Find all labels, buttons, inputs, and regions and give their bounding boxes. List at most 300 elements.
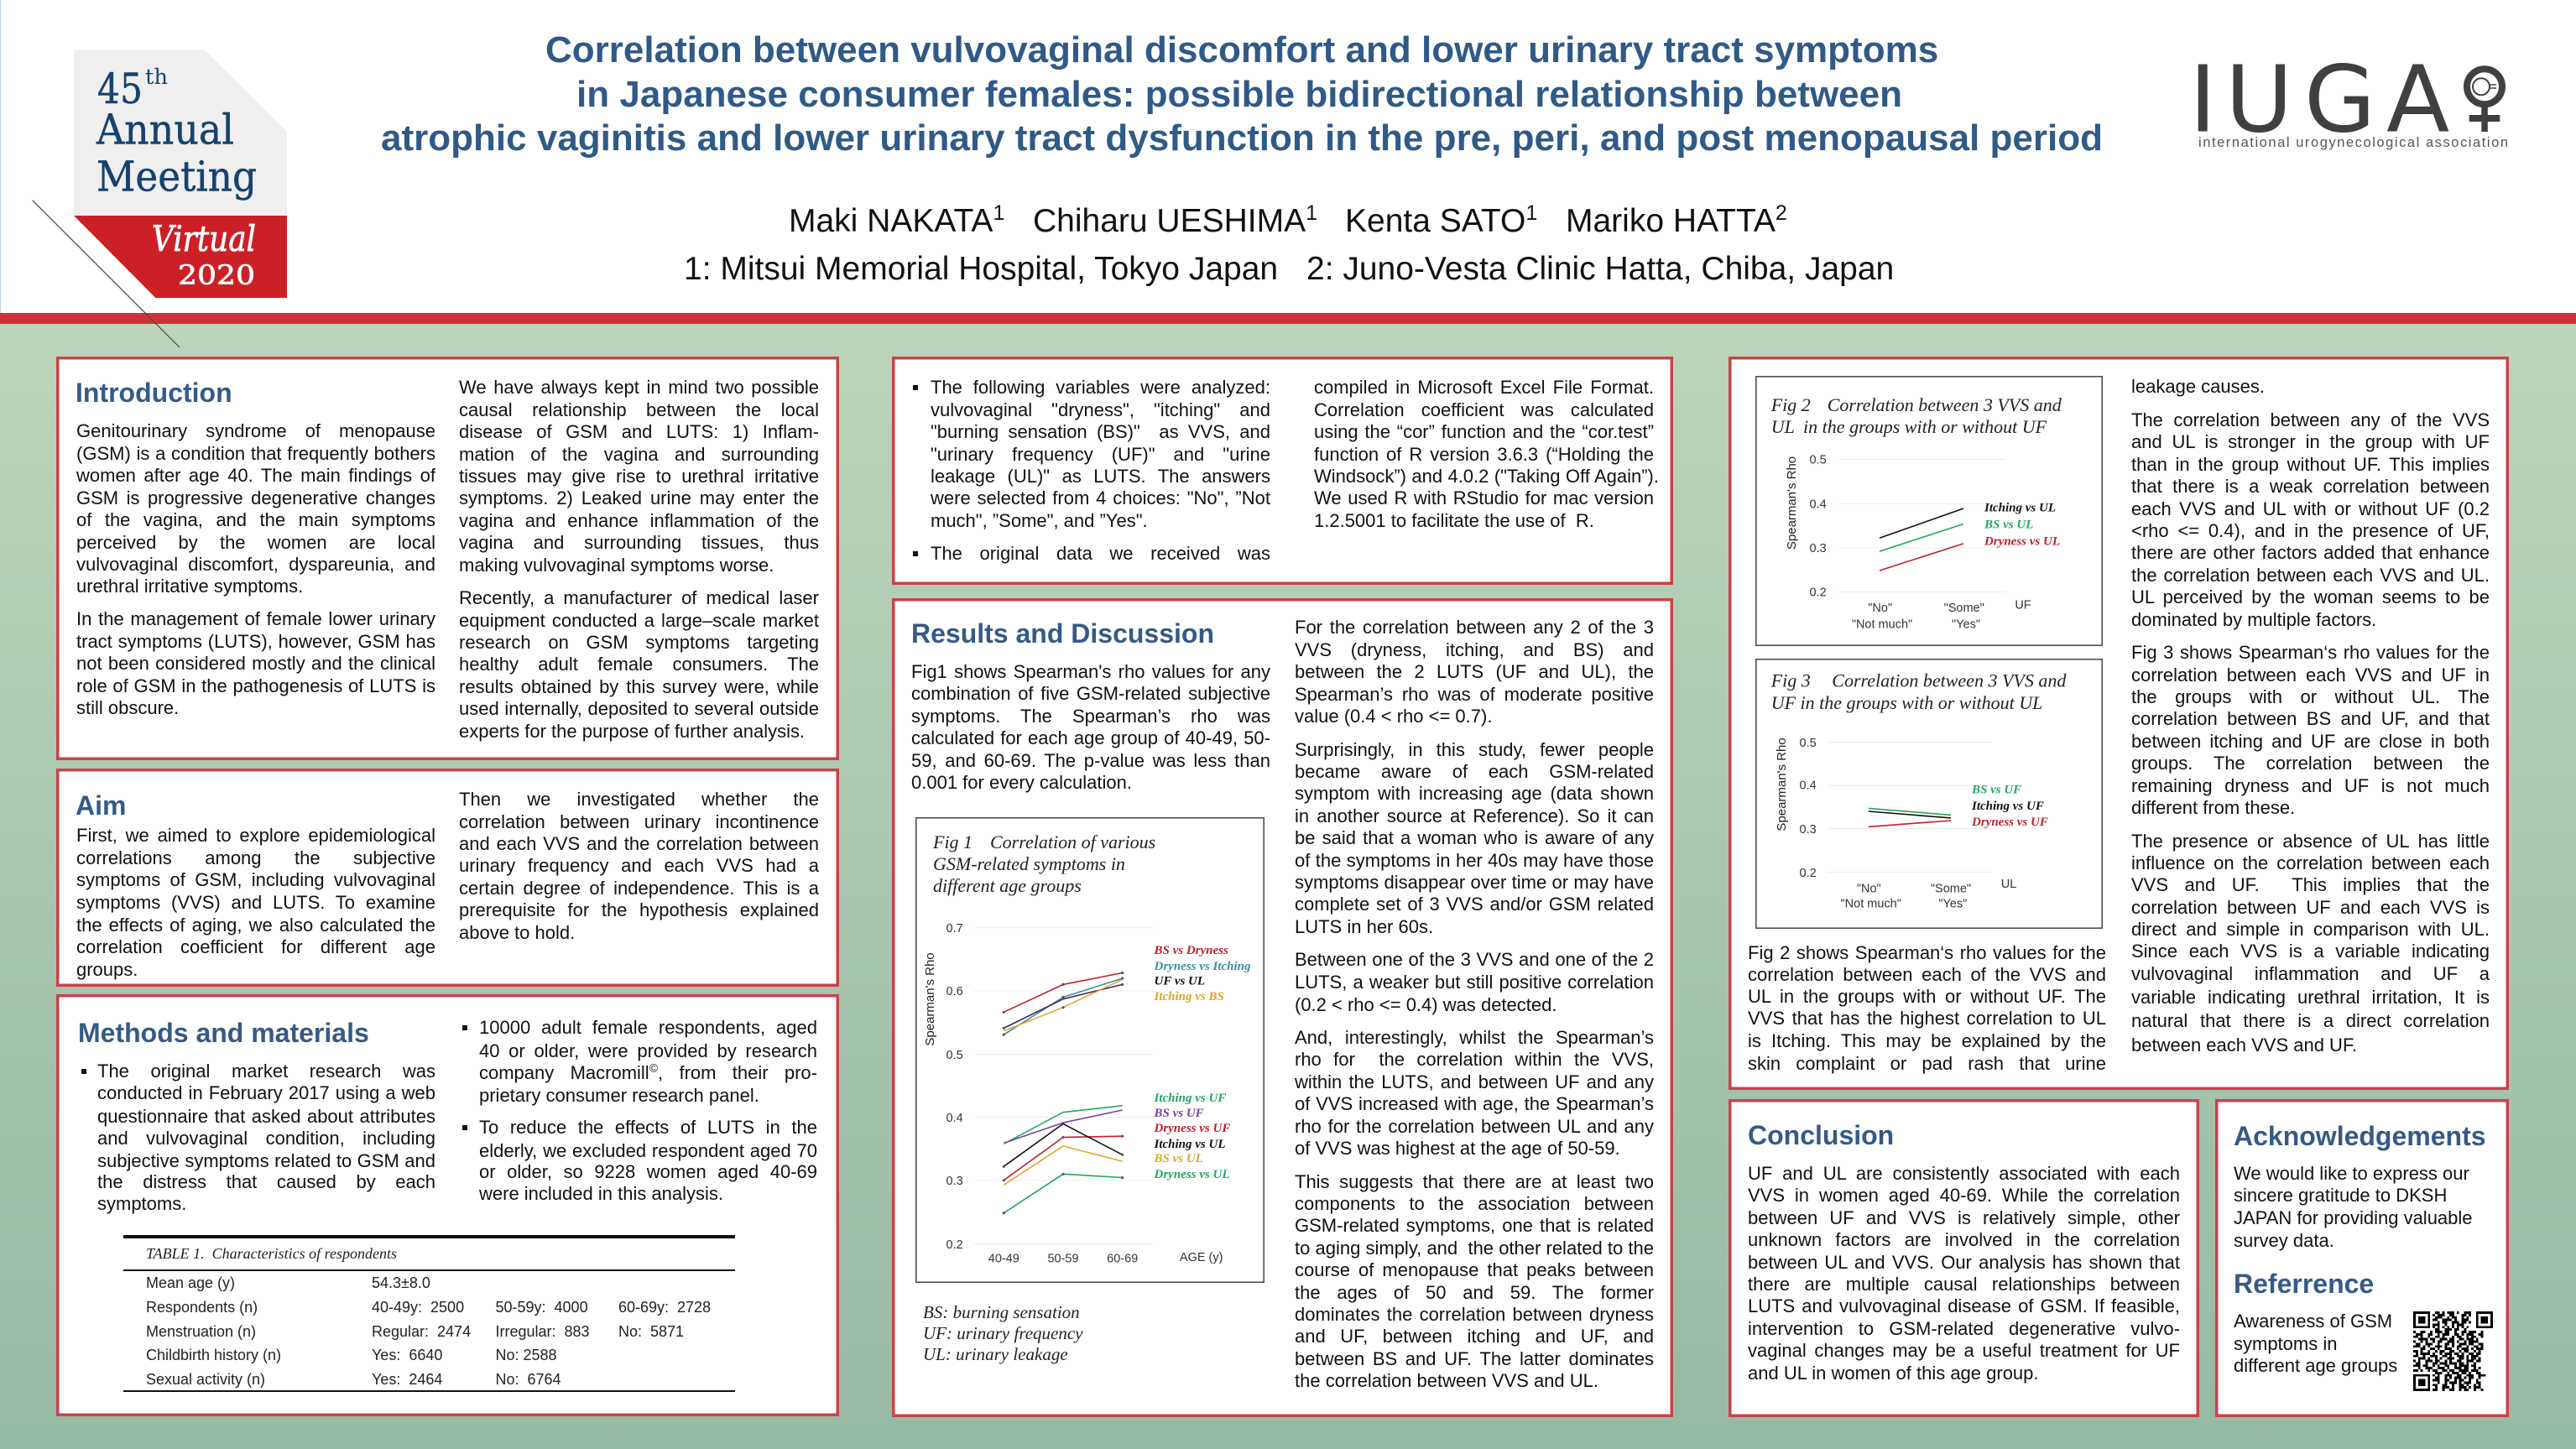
authors	[789, 201, 1787, 239]
panel: methods and materials	[56, 994, 839, 1416]
bullet marker	[913, 385, 918, 390]
table 1: characteristics of respondents: Sexual activity (n)	[146, 1371, 265, 1388]
text: conclusion body: VVS in women aged 40-69. While the correlation	[1748, 1185, 2180, 1206]
panel: results and discussion	[892, 598, 1673, 1417]
chart: figure 3 correlation with UF	[1755, 659, 2103, 929]
table 1: characteristics of respondents: No: 5871	[618, 1323, 684, 1340]
text: conclusion body: unknown factors are involved in the correlation	[1748, 1229, 2180, 1250]
chart: figure 3 correlation with UF: 0.2	[1800, 867, 1817, 880]
text: fig 1 description: 59, and 60-69. The p-value was less than	[911, 750, 1270, 771]
text: discussion right column: influence on the correlation between each	[2131, 852, 2490, 873]
table 1: characteristics of respondents: 40-49y: 2500	[372, 1299, 464, 1316]
text: introduction right column: vagina and surrounding tissues, thus	[459, 532, 819, 553]
chart: figure 1 correlation by age group: 50-59	[1047, 1253, 1079, 1266]
chart: figure 2 correlation with UL: Spearman's Rho	[1785, 456, 1799, 550]
heading: conclusion: Conclusion	[1748, 1120, 1894, 1150]
heading: results and discussion: Results and Discussion	[911, 618, 1214, 649]
text: discussion right column: VVS and UF. This implies that the	[2131, 874, 2490, 895]
text: methods second bullet: company Macromill©, from their pro-	[479, 1061, 817, 1083]
authors: Kenta SATO1	[1345, 201, 1537, 239]
text: discussion right column: Fig 3 shows Spearman‘s rho values for the	[2131, 642, 2490, 663]
table 1: characteristics of respondents: Menstruation (n)	[146, 1323, 256, 1340]
text: methods first bullet: and vulvovaginal condition, including	[97, 1128, 435, 1149]
text: methods third bullet: elderly, we excluded respondent aged 70	[479, 1140, 817, 1161]
text: introduction left column: still obscure.	[76, 697, 179, 718]
text: methods third bullet: or older, so 9228 women aged 40-69	[479, 1161, 817, 1182]
text: results right column	[1295, 617, 1654, 1391]
text: introduction left column: In the management of female lower urinary	[76, 608, 435, 629]
text: aim left column: correlations among the subjective	[76, 847, 435, 868]
text: results right column: LUTS in her 60s.	[1295, 916, 1433, 937]
text: discussion right column: Since each VVS is a variable indicating	[2131, 941, 2490, 962]
text: conclusion body: LUTS and vulvovaginal disease of GSM. If feasible,	[1748, 1295, 2180, 1316]
chart: figure 1 correlation by age group: Correlation of various	[990, 831, 1155, 852]
text: methods first bullet: the distress that caused by each	[97, 1171, 435, 1192]
chart: figure 2 correlation with UL: in the groups with or without UF	[1803, 416, 2047, 437]
chart: figure 1 correlation by age group: BS vs Dryness	[1153, 944, 1228, 957]
text: fig 1 description: 0.001 for every calculation.	[911, 772, 1132, 793]
table 1: characteristics of respondents: 60-69y: 2728	[618, 1299, 711, 1316]
text: fig 1 description: combination of five GSM-related subjective	[911, 683, 1270, 704]
text: data format and software: Correlation coefficient was calculated	[1314, 399, 1654, 420]
text: variables analyzed: "burning sensation (BS)" as VVS, and	[931, 421, 1270, 442]
text: discussion right column: correlation between BS and UF, and that	[2131, 708, 2490, 729]
text: introduction right column: vagina and enhance inflammation of the	[459, 510, 819, 531]
authors: Chiharu UESHIMA1	[1033, 201, 1317, 239]
text: results right column: components to the association between	[1295, 1193, 1654, 1214]
text: aim right column	[459, 789, 819, 943]
decorative diagonal line	[32, 200, 180, 347]
text: acknowledgements body: survey data.	[2234, 1230, 2334, 1251]
title	[381, 29, 2103, 159]
chart: figure 1 correlation by age group: AGE (y)	[1180, 1251, 1223, 1264]
text: introduction right column: disease of GSM and LUTS: 1) Inflam-	[459, 421, 819, 442]
chart: figure 1 correlation by age group: BS vs UL	[1153, 1152, 1203, 1165]
chart: figure 2 correlation with UL: 0.5	[1810, 454, 1827, 467]
text: results right column: (0.2 < rho <= 0.4) was detected.	[1295, 993, 1557, 1015]
text: introduction left column: vulvovaginal discomfort, dyspareunia, and	[76, 554, 435, 574]
chart: figure 2 correlation with UL: Dryness vs UL	[1984, 534, 2060, 548]
text: variables analyzed: were selected from 4 choices: "No", ”Not	[931, 487, 1270, 508]
chart: figure 2 correlation with UL: Fig 2	[1770, 394, 1811, 415]
chart: figure 3 correlation with UF: "No"	[1857, 883, 1881, 896]
text: discussion right column: UL perceived by the woman seems to be	[2131, 586, 2490, 607]
text: reference description: Awareness of GSM	[2234, 1311, 2392, 1332]
chart: figure 3 correlation with UF: Fig 3	[1770, 670, 1811, 691]
chart: figure 1 correlation by age group: Spearman's Rho	[923, 952, 937, 1046]
text: variables analyzed: leakage (UL)" as LUTS. The answers	[931, 466, 1270, 487]
text: results right column: in another source at Reference). So it can	[1295, 805, 1654, 826]
bullet marker	[81, 1069, 86, 1074]
chart: figure 3 correlation with UF: Correlation between 3 VVS and	[1832, 670, 2067, 691]
panel: introduction	[56, 357, 839, 760]
text: introduction left column: not been considered mostly and the clinical	[76, 653, 435, 674]
text: data format and software: using the “cor” function and the “cor.test”	[1314, 421, 1654, 442]
chart: figure 1 correlation by age group: 0.2	[946, 1238, 963, 1252]
text: results right column: rho for the correlation within the VVS,	[1295, 1049, 1654, 1070]
chart: figure 1 correlation by age group: Dryness vs UF	[1153, 1122, 1230, 1135]
title: in Japanese consumer females: possible bidirectional relationship between	[576, 74, 1902, 115]
text: conclusion body: and UL in women of this age group.	[1748, 1363, 2039, 1384]
text: results right column: the ages of 50 and 59. The former	[1295, 1282, 1654, 1303]
affiliations: 1: Mitsui Memorial Hospital, Tokyo Japan	[684, 251, 1278, 287]
text: introduction right column: research on GSM symptoms targeting	[459, 632, 819, 653]
chart: figure 1 correlation by age group: BS vs UF	[1153, 1107, 1204, 1120]
text: aim left column	[76, 825, 435, 980]
chart: figure 1 correlation by age group: GSM-related symptoms in	[933, 853, 1125, 874]
chart: figure 3 correlation with UF: BS vs UF	[1971, 784, 2021, 797]
chart: figure 2 correlation with UL: Itching vs UL	[1984, 502, 2056, 515]
text: discussion right column: there are other factors added that enhance	[2131, 542, 2490, 563]
chart: figure 3 correlation with UF: Itching vs UF	[1971, 800, 2044, 813]
text: fig 2 description: VVS that has the highest correlation to UL	[1748, 1008, 2106, 1029]
chart: figure 3 correlation with UF: UF in the groups with or without UL	[1771, 692, 2042, 713]
text: introduction right column: We have always kept in mind two possible	[459, 377, 819, 398]
text: conclusion body: UF and UL are consistently associated with each	[1748, 1163, 2180, 1184]
text: introduction right column	[459, 377, 819, 742]
text: variables analyzed: much", ”Some", and ”Yes".	[931, 510, 1148, 531]
chart: figure 1 correlation by age group	[915, 817, 1265, 1283]
text: variables analyzed	[931, 377, 1270, 531]
text: conclusion body: between UF and VVS is relatively simple, other	[1748, 1207, 2180, 1228]
text: methods second bullet: prietary consumer research panel.	[479, 1085, 759, 1106]
chart: figure 1 correlation by age group: 40-49	[988, 1253, 1019, 1266]
meeting badge: 45th Annual Meeting Virtual 2020: th	[145, 65, 168, 89]
text: results right column: of VVS was highest at the age of 50-59.	[1295, 1138, 1620, 1159]
text: results right column: between the 2 LUTS (UF and UL), the	[1295, 661, 1654, 682]
chart: figure 3 correlation with UF: "Not much"	[1841, 898, 1901, 911]
abbreviations note: BS: burning sensation	[923, 1302, 1080, 1322]
text: discussion right column: remaining dryness and UF is not much	[2131, 775, 2490, 796]
text: fig 2 description: correlation between each of the VVS and	[1748, 964, 2106, 985]
heading: introduction: Introduction	[76, 378, 232, 408]
text: discussion right column: correlation between each VVS and UF in	[2131, 665, 2490, 685]
table 1: characteristics of respondents: TABLE 1. Characteristics of respondents	[146, 1245, 397, 1262]
text: fig 2 description: is Itching. This may be explained by the	[1748, 1030, 2106, 1051]
text: results right column: Between one of the 3 VVS and one of the 2	[1295, 949, 1654, 970]
text: conclusion body: intervention to GSM-related degenerative vulvo-	[1748, 1318, 2180, 1339]
text: results right column: of VVS increased with age, the Spearman’s	[1295, 1093, 1654, 1114]
text: reference description	[2234, 1311, 2397, 1376]
text: fig 2 description	[1748, 942, 2106, 1074]
text: aim right column: above to hold.	[459, 922, 575, 943]
text: aim left column: symptoms (VVS) and LUTS. To examine	[76, 892, 435, 913]
chart: figure 3 correlation with UF: UL	[2001, 878, 2016, 891]
bullet marker	[462, 1125, 467, 1130]
text: results right column: within the LUTS, and between UF and any	[1295, 1071, 1654, 1092]
text: aim right column: certain degree of independence. This is a	[459, 878, 819, 899]
table 1: characteristics of respondents: No: 2588	[495, 1347, 557, 1363]
panel: aim	[56, 769, 839, 987]
text: introduction right column: mation of the vagina and surrounding	[459, 444, 819, 465]
text: data format and software: Windsock”) and 4.0.2 ("Taking Off Again”).	[1314, 466, 1659, 487]
text: introduction left column: Genitourinary syndrome of menopause	[76, 420, 435, 441]
chart: figure 1 correlation by age group: Dryness vs Itching	[1153, 960, 1251, 973]
text: data format and software	[1314, 377, 1659, 531]
text: results right column: became aware of each GSM-related	[1295, 761, 1654, 782]
text: results right column: Surprisingly, in this study, fewer people	[1295, 739, 1654, 760]
text: discussion right column: leakage causes.	[2131, 376, 2265, 397]
meeting badge: 45th Annual Meeting Virtual 2020: Annual	[96, 106, 234, 154]
text: acknowledgements body	[2234, 1163, 2473, 1251]
authors: Maki NAKATA1	[789, 201, 1004, 239]
text: discussion right column: natural that there is a direct correlation	[2131, 1010, 2490, 1031]
text: variables analyzed: The following variables were analyzed:	[931, 377, 1270, 398]
text: discussion right column: groups. The correlation between the	[2131, 753, 2490, 774]
text: discussion right column: <rho <= 0.4), and in the presence of UF,	[2131, 520, 2490, 541]
text: introduction left column: (GSM) is a condition that frequently bothers	[76, 443, 435, 464]
text: results right column: LUTS, a weaker but still positive correlation	[1295, 972, 1654, 993]
text: fig 2 description: UL in the groups with or without UF. The	[1748, 986, 2106, 1007]
chart: figure 1 correlation by age group: 0.7	[946, 922, 963, 936]
text: results right column: complete set of 3 VVS and/or GSM related	[1295, 894, 1654, 915]
text: results right column: GSM-related symptoms, one that is related	[1295, 1215, 1654, 1236]
text: discussion right column: different from these.	[2131, 797, 2295, 818]
text: discussion right column: between each VVS and UF.	[2131, 1035, 2357, 1055]
table 1: characteristics of respondents: No: 6764	[495, 1371, 561, 1388]
text: methods second bullet: 40 or older, were provided by research	[479, 1040, 817, 1061]
text: results right column: VVS (dryness, itching, and BS) and	[1295, 639, 1654, 660]
text: aim right column: and each VVS and the correlation between	[459, 833, 819, 854]
text: conclusion body	[1748, 1163, 2180, 1384]
text: introduction left column: of the vagina, and the main symptoms	[76, 509, 435, 530]
chart: figure 2 correlation with UL: 0.3	[1810, 542, 1827, 555]
affiliations: 2: Juno-Vesta Clinic Hatta, Chiba, Japan	[1306, 251, 1894, 287]
text: methods third bullet	[479, 1117, 817, 1204]
text: acknowledgements body: We would like to express our	[2234, 1163, 2469, 1184]
text: introduction right column: healthy adult female consumers. The	[459, 654, 819, 675]
text: methods second bullet: 10000 adult female respondents, aged	[479, 1017, 817, 1038]
chart: figure 1 correlation by age group: 0.4	[946, 1112, 963, 1125]
abbreviations note: UL: urinary leakage	[923, 1344, 1068, 1364]
text: conclusion body: there are multiple causal relationships between	[1748, 1274, 2180, 1295]
text: aim left column: correlation coefficient for different age	[76, 936, 435, 957]
text: aim right column: Then we investigated whether the	[459, 789, 819, 810]
meeting badge: 45th Annual Meeting Virtual 2020	[74, 50, 287, 298]
chart: figure 3 correlation with UF: 0.4	[1800, 779, 1817, 792]
table 1: characteristics of respondents: Respondents (n)	[146, 1299, 258, 1316]
text: results right column: the correlation between VVS and UL.	[1295, 1370, 1598, 1391]
title: atrophic vaginitis and lower urinary tract dysfunction in the pre, peri, and post menopausal period	[381, 117, 2103, 159]
text: data format and software: compiled in Microsoft Excel File Format.	[1314, 377, 1654, 398]
chart: figure 2 correlation with UL: UL	[1771, 416, 1795, 437]
text: methods third bullet: To reduce the effects of LUTS in the	[479, 1117, 817, 1138]
text: results right column: symptom with increasing age (data shown	[1295, 783, 1654, 804]
chart: figure 3 correlation with UF: 0.5	[1800, 737, 1817, 750]
text: discussion right column: vulvovaginal inflammation and UF a	[2131, 963, 2490, 984]
chart: figure 1 correlation by age group: Itching vs UF	[1153, 1092, 1226, 1105]
text: introduction right column: used internally, deposited to several outside	[459, 698, 819, 719]
table 1: characteristics of respondents: 50-59y: 4000	[495, 1299, 588, 1316]
text: results right column: rho for the correlation between UL and any	[1295, 1116, 1654, 1136]
text: introduction left column: urethral irritative symptoms.	[76, 576, 303, 597]
chart: figure 2 correlation with UL: "Yes"	[1952, 618, 1980, 631]
text: fig 1 description	[911, 661, 1270, 793]
text: reference description: symptoms in	[2234, 1333, 2337, 1354]
text: introduction left column: GSM is progressive degenerative changes	[76, 487, 435, 508]
panel: acknowledgements and reference	[2215, 1099, 2509, 1417]
text: variables analyzed: "urinary frequency (UF)" and "urine	[931, 444, 1270, 465]
text: methods second bullet	[479, 1017, 817, 1106]
text: discussion right column: dominated by multiple factors.	[2131, 609, 2376, 630]
text: aim left column: the effects of aging, we also calculated the	[76, 915, 435, 936]
text: fig 1 description: calculated for each age group of 40-49, 50-	[911, 727, 1270, 748]
text: results right column: of the symptoms in her 40s may have those	[1295, 850, 1654, 871]
text: data format and software: We used R with RStudio for mac version	[1314, 487, 1654, 508]
chart: figure 3 correlation with UF: Dryness vs UF	[1971, 816, 2048, 829]
text: acknowledgements body: JAPAN for providing valuable	[2234, 1207, 2473, 1228]
text: discussion right column: that there is a weak correlation between	[2131, 476, 2490, 497]
chart: figure 3 correlation with UF: "Yes"	[1938, 898, 1967, 911]
text: fig 1 description: symptoms. The Spearman’s rho was	[911, 706, 1270, 727]
text: discussion right column: between itching and UF are close in both	[2131, 731, 2490, 752]
IUGA logo: IUGA	[2189, 46, 2449, 154]
text: introduction right column: making vulvovaginal symptoms worse.	[459, 555, 774, 576]
text: discussion right column: The presence or absence of UL has little	[2131, 831, 2490, 852]
chart: figure 2 correlation with UL: 0.2	[1810, 586, 1827, 600]
text: fig 2 description: Fig 2 shows Spearman‘s rho values for the	[1748, 942, 2106, 963]
table 1: characteristics of respondents: Childbirth history (n)	[146, 1347, 281, 1363]
heading: reference: Referrence	[2234, 1269, 2374, 1299]
text: discussion right column: the correlation between each VVS and UL.	[2131, 565, 2490, 586]
meeting badge: 45th Annual Meeting Virtual 2020: Meeting	[96, 153, 257, 201]
chart: figure 2 correlation with UL	[1755, 376, 2103, 646]
panel: methods continued	[892, 357, 1673, 585]
text: results right column: course of menopause that peaks between	[1295, 1259, 1654, 1280]
text: introduction right column: equipment conducted a large–scale market	[459, 610, 819, 631]
text: aim left column: groups.	[76, 958, 138, 980]
panel: conclusion	[1729, 1099, 2199, 1417]
chart: figure 1 correlation by age group: 0.6	[946, 985, 963, 998]
text: aim left column: First, we aimed to explore epidemiological	[76, 825, 435, 846]
text: methods first bullet	[97, 1061, 435, 1214]
panel: figures 2 and 3 with discussion	[1729, 357, 2509, 1090]
abbreviations note	[923, 1302, 1082, 1364]
text: discussion right column: correlation between UF and each VVS is	[2131, 897, 2490, 918]
text: discussion right column: each VVS and UL with or without UF (0.2	[2131, 498, 2490, 519]
text: fig 1 description: Fig1 shows Spearman's rho values for any	[911, 661, 1270, 682]
text: aim right column: urinary frequency and each VVS had a	[459, 855, 819, 876]
text: results right column: Spearman’s rho was of moderate positive	[1295, 684, 1654, 705]
text: discussion right column: variable indicating urethral irritation, It is	[2131, 987, 2490, 1008]
bullet marker	[462, 1025, 467, 1030]
chart: figure 1 correlation by age group: 60-69	[1107, 1253, 1138, 1266]
chart: figure 3 correlation with UF: Spearman's Rho	[1775, 738, 1789, 831]
text: introduction left column: perceived by the women are local	[76, 532, 435, 553]
table 1: characteristics of respondents	[123, 1235, 735, 1392]
text: discussion right column	[2131, 376, 2490, 1055]
text: introduction left column: role of GSM in the pathogenesis of LUTS is	[76, 675, 435, 696]
text: results right column: For the correlation between any 2 of the 3	[1295, 617, 1654, 638]
chart: figure 2 correlation with UL: BS vs UL	[1984, 519, 2033, 532]
chart: figure 2 correlation with UL: "No"	[1868, 602, 1892, 615]
abbreviations note: UF: urinary frequency	[923, 1323, 1082, 1343]
icon: QR code	[2413, 1311, 2493, 1391]
text: conclusion body: between UL and VVS. Our analysis has shown that	[1748, 1252, 2180, 1273]
text: conclusion body: vaginal changes may be a useful treatment for UF	[1748, 1340, 2180, 1361]
text: introduction right column: Recently, a manufacturer of medical laser	[459, 587, 819, 608]
text: original data: The original data we received was	[931, 543, 1270, 564]
text: introduction left column: women after age 40. The main findings of	[76, 465, 435, 486]
text: discussion right column: than in the group without UF. This implies	[2131, 454, 2490, 475]
chart: figure 1 correlation by age group: Itching vs UL	[1153, 1138, 1226, 1151]
chart: figure 3 correlation with UF: 0.3	[1800, 823, 1817, 837]
text: results right column: dominates the correlation between dryness	[1295, 1304, 1654, 1325]
meeting badge: 45th Annual Meeting Virtual 2020: 2020	[178, 259, 255, 291]
text: results right column: This suggests that there are at least two	[1295, 1171, 1654, 1192]
chart: figure 1 correlation by age group: Fig 1	[932, 831, 973, 852]
text: introduction right column: results obtained by this survey were, while	[459, 676, 819, 697]
text: methods first bullet: subjective symptoms related to GSM and	[97, 1150, 435, 1171]
text: introduction right column: experts for the purpose of further analysis.	[459, 721, 805, 742]
text: results right column: and UF, between itching and UF, and	[1295, 1326, 1654, 1347]
chart: figure 1 correlation by age group: Itching vs BS	[1153, 990, 1224, 1003]
text: methods third bullet: were included in this analysis.	[479, 1183, 723, 1204]
text: results right column: be said that a woman who is aware of any	[1295, 827, 1654, 848]
text: discussion right column: and UL is stronger in the group with UF	[2131, 431, 2490, 452]
text: aim right column: correlation between urinary incontinence	[459, 811, 819, 832]
text: introduction left column	[76, 420, 436, 718]
chart: figure 2 correlation with UL: "Not much"	[1852, 618, 1912, 631]
text: data format and software: 1.2.5001 to facilitate the use of R.	[1314, 510, 1594, 531]
chart: figure 2 correlation with UL: Correlation between 3 VVS and	[1828, 394, 2062, 415]
authors: Mariko HATTA2	[1566, 201, 1787, 239]
text: methods first bullet: questionnaire that asked about attributes	[97, 1106, 435, 1127]
table 1: characteristics of respondents: Mean age (y)	[146, 1274, 235, 1291]
chart: figure 1 correlation by age group: 0.3	[946, 1175, 963, 1188]
chart: figure 3 correlation with UF: "Some"	[1931, 883, 1971, 896]
text: aim left column: symptoms of GSM, including vulvovaginal	[76, 869, 435, 890]
chart: figure 1 correlation by age group: 0.5	[946, 1049, 963, 1062]
text: results right column: to aging simply, and the other related to the	[1295, 1238, 1654, 1259]
heading: methods and materials: Methods and materials	[78, 1018, 369, 1048]
text: introduction right column: symptoms. 2) Leaked urine may enter the	[459, 487, 819, 508]
heading: acknowledgements: Acknowledgements	[2234, 1121, 2486, 1151]
title: Correlation between vulvovaginal discomfort and lower urinary tract symptoms	[545, 29, 1938, 70]
text: aim right column: prerequisite for the hypothesis explained	[459, 899, 819, 920]
text: acknowledgements body: sincere gratitude to DKSH	[2234, 1185, 2447, 1206]
text: discussion right column: The correlation between any of the VVS	[2131, 409, 2490, 430]
chart: figure 1 correlation by age group: different age groups	[933, 875, 1082, 896]
chart: figure 1 correlation by age group: UF vs UL	[1155, 975, 1205, 988]
text: results right column: symptoms disappear over time or may have	[1295, 872, 1654, 893]
text: introduction left column: tract symptoms (LUTS), however, GSM has	[76, 631, 435, 652]
affiliations	[684, 251, 1894, 287]
table 1: characteristics of respondents: Regular: 2474	[372, 1323, 471, 1340]
text: results right column: between BS and UF. The latter dominates	[1295, 1348, 1654, 1369]
text: methods first bullet: symptoms.	[97, 1193, 186, 1214]
meeting badge: 45th Annual Meeting Virtual 2020: Virtual	[152, 218, 256, 259]
table 1: characteristics of respondents: 54.3±8.0	[372, 1274, 430, 1291]
table 1: characteristics of respondents: Yes: 6640	[372, 1347, 442, 1363]
chart: figure 2 correlation with UL: "Some"	[1944, 602, 1984, 615]
text: variables analyzed: vulvovaginal "dryness", "itching" and	[931, 399, 1270, 420]
text: fig 2 description: skin complaint or pad rash that urine	[1748, 1053, 2106, 1074]
text: methods first bullet: The original market research was	[97, 1061, 435, 1082]
text: reference description: different age groups	[2234, 1355, 2397, 1376]
chart: figure 1 correlation by age group: Dryness vs UL	[1153, 1168, 1230, 1181]
text: introduction right column: causal relationship between the local	[459, 399, 819, 420]
text: results right column: And, interestingly, whilst the Spearman’s	[1295, 1027, 1654, 1048]
chart: figure 2 correlation with UL: 0.4	[1810, 498, 1827, 512]
text: data format and software: function of R version 3.6.3 (“Holding the	[1314, 444, 1654, 465]
chart: figure 2 correlation with UL: UF	[2015, 599, 2031, 612]
text: introduction right column: tissues may give rise to urethral irritative	[459, 466, 819, 487]
IUGA logo: international urogynecological association	[2198, 135, 2508, 150]
text: discussion right column: direct and simple in comparison with UL.	[2131, 919, 2490, 940]
table 1: characteristics of respondents: Irregular: 883	[495, 1323, 590, 1340]
bullet marker	[913, 551, 918, 556]
